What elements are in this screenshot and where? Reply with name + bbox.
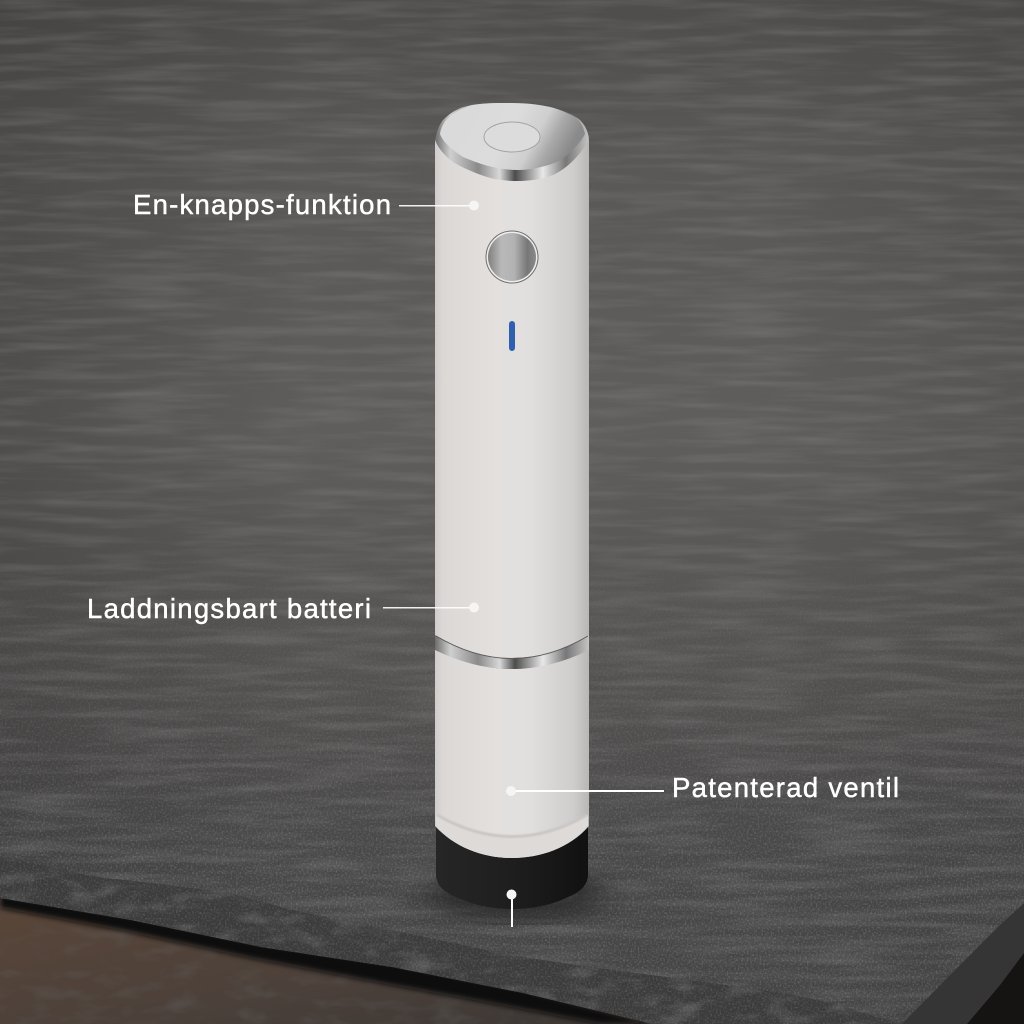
upper white body — [435, 140, 589, 659]
product shadow — [424, 872, 608, 920]
callout: En-knapps-funktion: En-knapps-funktion — [133, 189, 391, 220]
slate right broken edge — [902, 903, 1024, 1024]
collar groove — [437, 815, 587, 836]
metal ring — [435, 635, 589, 669]
black base — [436, 825, 588, 909]
wooden floor below the slate — [0, 898, 652, 1024]
callout: base marker — [506, 890, 516, 927]
slate shadow on floor — [0, 894, 653, 1024]
lower white body — [435, 648, 589, 858]
ring top shadow — [436, 636, 588, 658]
slate front broken edge — [0, 858, 899, 1024]
blue LED — [509, 321, 515, 351]
callout: Laddningsbart batteri: Laddningsbart batteri — [87, 593, 371, 624]
corner floor — [967, 953, 1024, 1024]
top cap — [440, 103, 585, 170]
callout: Patenterad ventil: Patenterad ventil — [672, 772, 899, 803]
callout: Patenterad ventil — [506, 772, 899, 803]
translucent collar band — [436, 815, 588, 858]
top bezel — [435, 103, 589, 181]
side button — [486, 231, 538, 283]
product: wine opener — [435, 103, 589, 909]
top button — [484, 122, 540, 152]
